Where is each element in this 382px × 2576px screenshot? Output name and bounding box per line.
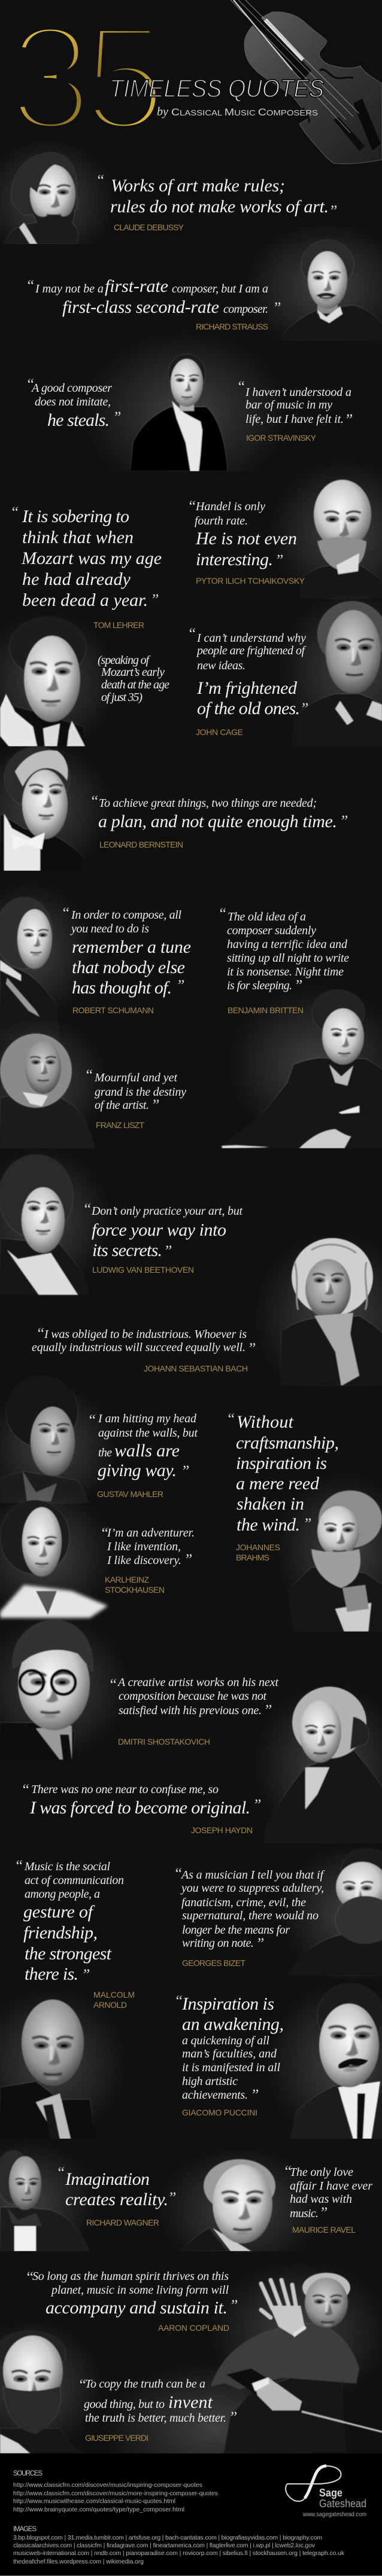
portrait: Gustav Mahler [0, 1376, 117, 1510]
quote: Bernstein: “ [90, 792, 98, 810]
name: Johannes Brahms: BRAHMS [236, 1553, 269, 1562]
sources list: http://www.musicwithease.com/classical-music-quotes.html [13, 2498, 175, 2505]
quote: Schumann: ” [176, 977, 184, 994]
quote: Tchaikovsky: Handel is only [195, 500, 265, 513]
quote: Shostakovich: “ [108, 1676, 117, 1693]
quote: Verdi: “ [78, 2376, 86, 2394]
sources list: http://www.brainyquote.com/quotes/type/type_composer.html [13, 2506, 184, 2513]
quote: John Cage: “ [187, 625, 196, 642]
quote: Bizet: longer be the means for [182, 1923, 290, 1937]
quote: Haydn: There was no one near to confuse me, so [31, 1783, 219, 1796]
quote: Stockhausen: I like invention, [107, 1540, 181, 1553]
quote: Shostakovich [108, 1676, 278, 1719]
quote: Stravinsky right: “ [237, 378, 245, 395]
quote: Bizet: “ [174, 1865, 182, 1882]
quote: Verdi: ” [229, 2409, 237, 2426]
name: Leonard Bernstein: LEONARD BERNSTEIN [99, 840, 183, 849]
name: Gustav Mahler: GUSTAV MAHLER [97, 1489, 163, 1499]
quote: Mahler: walls are [114, 1441, 180, 1461]
quote: Puccini: ” [250, 2086, 259, 2104]
quote: Bernstein [90, 792, 348, 831]
quote: Mahler: the [98, 1446, 112, 1459]
name: Richard Wagner: RICHARD WAGNER [86, 2218, 159, 2227]
portrait: Karlheinz Stockhausen [0, 1489, 114, 1621]
quote: John Cage: new ideas. [197, 659, 245, 672]
quote: Ravel: music. [290, 2207, 319, 2220]
quote: Copland: So long as the human spirit thrives on this [32, 2270, 229, 2283]
quote: Stravinsky left: does not imitate, [35, 395, 111, 408]
images list: 3.bp.blogspot.com | 31.media.tumblr.com | artsfuse.org | bach-cantatas.com | biografiasyvidas.com | biography.com [13, 2534, 322, 2541]
quote: Debussy: ” [329, 202, 337, 220]
logo: Sage Gateshead [286, 2466, 366, 2518]
quote: Brahms: ” [303, 1515, 311, 1532]
quote: Liszt: “ [84, 1066, 93, 1084]
quote: Schumann: “ [61, 904, 69, 922]
quote: Shostakovich: ” [263, 1702, 272, 1719]
note: Lehrer context: death at the age [101, 678, 169, 691]
name: Malcolm Arnold [93, 1990, 135, 2010]
panel: Shostakovich and Haydn [0, 1615, 382, 1845]
portrait: Leonard Bernstein [0, 742, 111, 873]
quote: Bizet: supernatural, there would no [182, 1909, 319, 1922]
portrait: Johannes Brahms [275, 1474, 382, 1632]
images list [13, 2534, 345, 2565]
name: Karlheinz Stockhausen: KARLHEINZ [105, 1575, 149, 1584]
quote: Shostakovich: composition because he was not [119, 1690, 266, 1703]
quote: Copland: planet, music in some living form will [50, 2284, 229, 2297]
quote: Wagner: ” [168, 2189, 176, 2206]
name: Claude Debussy: CLAUDE DEBUSSY [114, 222, 184, 232]
quote: Wagner: creates reality. [65, 2190, 168, 2209]
quote: Brahms: Without [237, 1412, 294, 1432]
name: Giacomo Puccini: GIACOMO PUCCINI [182, 2108, 257, 2117]
quote: Beethoven [83, 1200, 242, 1260]
quote: Stockhausen [100, 1525, 195, 1568]
quote: Malcolm Arnold: Music is the social [24, 1860, 110, 1873]
images list: classicalarchives.com | classicfm | findagrave.com | fineartamerica.com | flaglerlive.com | i.wp.pl | lcweb2.loc.gov [13, 2542, 316, 2549]
quote: Brahms: a mere reed [236, 1474, 320, 1493]
quote: Britten: having a terrific idea and [227, 938, 348, 951]
subtitle: CLASSICAL MUSIC COMPOSERS [171, 106, 318, 118]
quote: Strauss: composer, but I am a [172, 282, 268, 295]
quote: Tchaikovsky [187, 498, 297, 569]
sources list: http://www.classicfm.com/discover/music/inspiring-composer-quotes [13, 2482, 202, 2489]
portrait: Dmitri Shostakovich [0, 1615, 129, 1760]
quote: Tom Lehrer: think that when [22, 528, 134, 547]
quote: Beethoven: “ [83, 1200, 91, 1218]
name: Karlheinz Stockhausen [105, 1575, 165, 1595]
panel: Wagner and Ravel [0, 2139, 382, 2273]
portrait: Richard Wagner [0, 2141, 96, 2261]
quote: Strauss: ” [272, 299, 281, 316]
name: Aaron Copland: AARON COPLAND [158, 2323, 229, 2333]
note: Lehrer context: of just 35) [101, 691, 143, 704]
quote: Liszt: Mournful and yet [94, 1071, 177, 1084]
quote: Malcolm Arnold: among people, a [25, 1888, 100, 1901]
quote: Schumann: you need to do is [70, 922, 149, 935]
quote: Schumann [61, 904, 191, 998]
panel: Lehrer, Tchaikovsky, Cage [0, 461, 382, 751]
quote: Brahms: “ [226, 1410, 235, 1428]
quote: Britten: is for sleeping. [227, 979, 292, 992]
quote: Mahler: against the walls, but [98, 1426, 198, 1440]
note: Lehrer context [98, 654, 169, 704]
name: Malcolm Arnold: ARNOLD [93, 2000, 127, 2010]
quote: Malcolm Arnold: friendship, [23, 1923, 98, 1943]
footer [0, 2453, 382, 2576]
quote: Verdi: To copy the truth can be a [85, 2377, 205, 2391]
quote: Malcolm Arnold: “ [14, 1857, 23, 1874]
quote: Mahler: “ [87, 1412, 96, 1429]
quote: Liszt: of the artist. [95, 1099, 149, 1112]
quote: Malcolm Arnold: there is. [25, 1964, 78, 1984]
quote: Strauss: first-class second-rate [62, 297, 219, 317]
portrait: Maurice Ravel [159, 2147, 320, 2273]
name: Karlheinz Stockhausen: STOCKHAUSEN [105, 1585, 165, 1595]
name: Igor Stravinsky: IGOR STRAVINSKY [246, 433, 317, 443]
quote: Liszt: ” [151, 1096, 159, 1114]
quote: Stravinsky right [237, 378, 353, 428]
quote: Wagner: Imagination [65, 2169, 150, 2189]
quote: Britten: The old idea of a [228, 910, 306, 923]
portrait: Igor Stravinsky [84, 332, 287, 493]
quote: Debussy: rules do not make works of art. [110, 197, 329, 217]
quote: Strauss: “ [26, 277, 34, 294]
quote: Puccini: Inspiration is [181, 1994, 274, 2014]
panel: Schumann, Liszt, Britten [0, 871, 382, 1148]
quote: Tchaikovsky: ” [275, 551, 283, 569]
panel: Arnold, Bizet, Puccini [0, 1843, 382, 2144]
quote: Tom Lehrer: he had already [22, 569, 131, 589]
quote: Puccini: it is manifested in all [182, 2061, 280, 2074]
quote: Bach: I was obliged to be industrious. Whoever is [44, 1328, 247, 1341]
quote: John Cage [187, 625, 308, 718]
quote: Britten: “ [218, 905, 226, 922]
quote: Ravel: The only love [290, 2166, 353, 2179]
portrait: Giacomo Puccini [266, 1983, 382, 2144]
quote: Britten: ” [294, 977, 302, 994]
name: Georges Bizet: GEORGES BIZET [182, 1958, 245, 1968]
quote: Beethoven: force your way into [92, 1220, 226, 1240]
quote: Bach: equally industrious will succeed equally well. [32, 1341, 245, 1354]
quote: Debussy: “ [96, 172, 104, 189]
quote: Stravinsky left [26, 376, 121, 430]
quote: Puccini: high artistic [182, 2075, 238, 2088]
quote: Britten: it is nonsense. Night time [227, 965, 344, 978]
name: Joseph Haydn: JOSEPH HAYDN [191, 1825, 253, 1835]
quote: Stockhausen: I like discovery. [107, 1554, 181, 1567]
quote: Copland [25, 2269, 238, 2318]
quote: Bizet [174, 1865, 325, 1952]
quote: Schumann: that nobody else [72, 958, 185, 977]
quote: Wagner: “ [56, 2164, 65, 2181]
quote: Debussy [96, 172, 337, 220]
quote: Bernstein: ” [339, 812, 348, 830]
portrait: John Cage [278, 592, 382, 748]
quote: Tom Lehrer: “ [10, 504, 19, 521]
quote: Stockhausen: I’m an adventurer. [107, 1526, 195, 1539]
quote: Stockhausen: ” [184, 1551, 192, 1568]
quote: Mahler: giving way. [98, 1461, 177, 1480]
quote: Schumann: remember a tune [72, 937, 191, 957]
quote: Bach: “ [36, 1325, 44, 1342]
note: Lehrer context: (speaking of [98, 654, 150, 667]
quote: Copland: accompany and sustain it. [46, 2298, 228, 2318]
quote: Bizet: ” [256, 1935, 264, 1952]
quote: Puccini: “ [174, 1992, 183, 2010]
quote: Beethoven: Don’t only practice your art, but [91, 1205, 242, 1218]
quote: Haydn: I was forced to become original. [29, 1798, 250, 1818]
quote: Tom Lehrer [10, 504, 162, 610]
quote: Bizet: writing on note. [182, 1937, 254, 1950]
name: Maurice Ravel: MAURICE RAVEL [292, 2225, 356, 2234]
quote: Brahms: craftsmanship, [236, 1433, 339, 1453]
quote: Malcolm Arnold [14, 1857, 124, 1984]
note: Lehrer context: Mozart’s early [101, 666, 165, 679]
quote: Tom Lehrer: Mozart was my age [21, 548, 162, 568]
panel: Strauss [0, 221, 382, 353]
title: timeless quotes: TIMELESS QUOTES [110, 74, 324, 102]
quote: Stravinsky right: I haven’t understood a [245, 386, 351, 399]
quote: Brahms: the wind. [237, 1515, 300, 1535]
quote: Tchaikovsky: interesting. [196, 550, 273, 569]
quote: Verdi: invent [168, 2392, 213, 2412]
icon: violin [228, 0, 382, 164]
quote: Bach [32, 1325, 256, 1357]
quote: Strauss: composer. [223, 303, 268, 316]
images list: musicweb-international.com | nndb.com | pianoparadise.com | rovicorp.com | sibelius.fi | stockhausen.org | telegraph.co.uk [13, 2550, 345, 2557]
quote: Tchaikovsky: He is not even [195, 529, 297, 548]
name: Giuseppe Verdi: GIUSEPPE VERDI [85, 2433, 148, 2443]
sources list: http://www.classicfm.com/discover/music/more-inspiring-composer-quotes [13, 2490, 218, 2497]
quote: Puccini: man’s faculties, and [182, 2047, 277, 2060]
name: Malcolm Arnold: MALCOLM [93, 1990, 135, 1999]
images heading: IMAGES [13, 2526, 37, 2533]
quote: Haydn [21, 1781, 261, 1818]
portrait: Ludwig van Beethoven [0, 1148, 111, 1295]
name: Johannes Brahms: JOHANNES [236, 1542, 280, 1552]
panel: Beethoven and Bach [0, 1148, 382, 1400]
portrait: Tom Lehrer [0, 613, 117, 751]
quote: Shostakovich: A creative artist works on his next [117, 1676, 278, 1689]
portrait: Aaron Copland [210, 2261, 382, 2453]
quote: Liszt [84, 1066, 186, 1114]
name: Richard Strauss: RICHARD STRAUSS [196, 322, 268, 331]
quote: Bizet: As a musician I tell you that if [180, 1868, 325, 1882]
portrait: Franz Liszt [0, 1017, 108, 1148]
quote: Stravinsky left: he steals. [47, 410, 110, 430]
logo: Sage Gateshead: www.sagegateshead.com [302, 2511, 366, 2518]
quote: Ravel: affair I have ever [290, 2179, 372, 2193]
quote: Britten: sitting up all night to write [227, 952, 349, 965]
quote: Tom Lehrer: been dead a year. [22, 590, 148, 610]
portrait: Robert Schumann [0, 882, 93, 1041]
portrait: Richard Strauss [245, 221, 382, 353]
quote: Schumann: has thought of. [72, 978, 172, 998]
quote: Strauss [26, 276, 281, 317]
quote: John Cage: I’m frightened [196, 678, 298, 698]
quote: Puccini: a quickening of all [182, 2034, 269, 2047]
quote: Puccini: achievements. [182, 2089, 248, 2102]
subtitle: by [157, 105, 168, 118]
name: Franz Liszt: FRANZ LISZT [96, 1120, 144, 1130]
name: Benjamin Britten: BENJAMIN BRITTEN [228, 1005, 304, 1015]
portrait: Giuseppe Verdi [0, 2321, 102, 2453]
quote: Ravel: ” [319, 2204, 328, 2221]
quote: Verdi: good thing, but to [84, 2398, 165, 2411]
name: Johann Sebastian Bach: JOHANN SEBASTIAN BACH [144, 1364, 248, 1373]
quote: Bach: ” [247, 1340, 256, 1357]
quote: Bizet: fanaticism, crime, evil, the [181, 1896, 306, 1909]
logo: Sage Gateshead: Sage [319, 2487, 342, 2499]
portrait: Georges Bizet [281, 1845, 382, 1983]
quote: Verdi [78, 2376, 237, 2426]
quote: Puccini [174, 1992, 284, 2104]
quote: Tchaikovsky: fourth rate. [195, 514, 248, 528]
panel: Bernstein [0, 742, 382, 873]
quote: Ravel [283, 2163, 372, 2221]
portrait: Pytor Ilich Tchaikovsky [269, 461, 382, 604]
quote: Stravinsky right: bar of music in my [245, 398, 332, 411]
name: Ludwig van Beethoven: LUDWIG VAN BEETHOVEN [92, 1265, 194, 1275]
quote: John Cage: I can’t understand why [196, 632, 306, 645]
quote: Puccini: an awakening, [182, 2014, 284, 2034]
quote: Malcolm Arnold: the strongest [25, 1944, 112, 1964]
panel: Copland and Verdi [0, 2251, 382, 2494]
quote: Schumann: In order to compose, all [71, 909, 181, 922]
name: Robert Schumann: ROBERT SCHUMANN [72, 1005, 154, 1015]
quote: Malcolm Arnold: gesture of [23, 1902, 95, 1922]
quote: Shostakovich: satisfied with his previous one. [119, 1704, 262, 1717]
name: Dmitri Shostakovich: DMITRI SHOSTAKOVICH [118, 1737, 210, 1746]
quote: Stravinsky right: ” [344, 411, 353, 428]
quote: Haydn: “ [21, 1781, 29, 1798]
sources heading: SOURCES [13, 2470, 43, 2477]
quote: John Cage: of the old ones. [197, 699, 300, 718]
quote: Bernstein: To achieve great things, two things are needed; [99, 797, 317, 810]
panel: Mahler, Brahms, Stockhausen [0, 1376, 382, 1632]
portrait: Johann Sebastian Bach [254, 1232, 382, 1400]
quote: Britten [218, 905, 349, 994]
name: Pytor Ilich Tchaikovsky: PYTOR ILICH TCHAIKOVSKY [196, 576, 305, 586]
quote: Mahler: I am hitting my head [98, 1412, 197, 1425]
quote: Bernstein: a plan, and not quite enough time. [98, 812, 337, 831]
portrait: Joseph Haydn [254, 1684, 382, 1845]
quote: Stravinsky left: “ [26, 376, 34, 393]
quote: Brahms: shaken in [237, 1494, 304, 1514]
quote: Beethoven: its secrets. [92, 1240, 162, 1260]
panel: title and Debussy [0, 0, 382, 263]
quote: Tom Lehrer: ” [150, 591, 159, 608]
sources list [13, 2482, 218, 2513]
portrait: Claude Debussy [0, 138, 117, 263]
quote: Ravel: “ [283, 2163, 292, 2180]
portrait: Benjamin Britten [219, 987, 382, 1148]
quote: Ravel: had was with [290, 2193, 352, 2206]
quote: Verdi: the truth is better, much better. [85, 2412, 226, 2425]
name: John Cage: JOHN CAGE [196, 727, 243, 737]
quote: Mahler [87, 1412, 198, 1480]
quote: Malcolm Arnold: ” [81, 1966, 90, 1983]
quote: Copland: “ [25, 2269, 34, 2286]
portrait: Malcolm Arnold [0, 1989, 126, 2139]
name: Tom Lehrer: TOM LEHRER [93, 620, 144, 630]
quote: Stravinsky left: A good composer [31, 382, 112, 395]
quote: Bizet: you were to suppress adultery, [180, 1882, 324, 1895]
panel: Stravinsky [0, 332, 382, 493]
quote: Stockhausen: “ [100, 1525, 108, 1542]
quote: Tchaikovsky: “ [187, 498, 196, 515]
quote: Stravinsky left: ” [113, 408, 121, 426]
logo: Sage Gateshead: Gateshead [319, 2498, 366, 2510]
images list: thedeafchef.files.wordpress.com | wikimedia.org [13, 2558, 144, 2565]
quote: Wagner [56, 2164, 176, 2209]
quote: Brahms: inspiration is [236, 1453, 327, 1473]
quote: John Cage: people are frightened of [196, 644, 306, 657]
quote: Liszt: grand is the destiny [95, 1086, 186, 1099]
quote: Tom Lehrer: It is sobering to [22, 507, 129, 526]
quote: John Cage: ” [300, 700, 308, 717]
quote: Brahms [226, 1410, 339, 1535]
quote: Strauss: first-rate [105, 276, 168, 296]
name: Johannes Brahms [236, 1542, 280, 1562]
quote: Debussy: Works of art make rules; [111, 176, 285, 196]
quote: Malcolm Arnold: act of communication [25, 1874, 124, 1887]
quote: Haydn: ” [253, 1796, 261, 1813]
quote: Mahler: ” [181, 1462, 189, 1480]
quote: Strauss: I may not be a [35, 282, 104, 295]
quote: Britten: composer suddenly [227, 924, 316, 937]
quote: Copland: ” [229, 2297, 238, 2314]
quote: Beethoven: ” [163, 1242, 172, 1260]
quote: Stravinsky right: life, but I have felt it. [245, 413, 344, 426]
